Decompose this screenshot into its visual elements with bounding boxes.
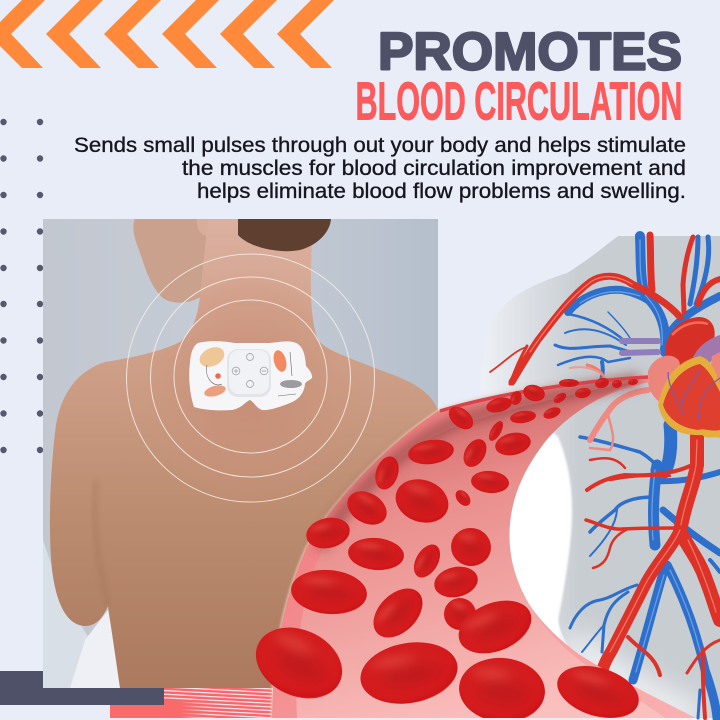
- control pad: [227, 349, 271, 397]
- arteries: [490, 235, 720, 718]
- artery highlights: [530, 277, 716, 652]
- massager patch: [189, 341, 312, 410]
- striped accent at bottom: [110, 688, 272, 718]
- photo backdrop: [43, 219, 438, 636]
- panel: blood vessel with red cells: [244, 376, 700, 720]
- description text: Sends small pulses through out your body and helps stimulate: [74, 134, 686, 157]
- right lobe: [710, 352, 720, 390]
- purple vein ends: [622, 341, 658, 353]
- fade near vessel: [570, 640, 700, 720]
- orange chevron band: [0, 0, 334, 68]
- yellow fat border: [658, 356, 720, 438]
- lumen top shadow: [320, 380, 640, 548]
- pale branch arteries: [590, 390, 648, 450]
- body silhouette: [480, 236, 720, 718]
- vein highlights: [580, 240, 704, 672]
- description text: [74, 134, 686, 203]
- head hair: [238, 219, 331, 251]
- aortic arch: [665, 317, 715, 372]
- panel: back photo with massager: [43, 219, 438, 688]
- coronary vessels: [668, 370, 720, 420]
- dot grid decoration: [0, 119, 43, 453]
- face and ear: [133, 219, 214, 303]
- back and shoulders: [50, 219, 438, 688]
- description text: the muscles for blood circulation improvement and: [182, 157, 686, 180]
- heart: [648, 317, 720, 438]
- description text: helps eliminate blood flow problems and swelling.: [197, 180, 686, 203]
- arm crease shadow: [95, 480, 108, 606]
- vessel red rim: [440, 377, 648, 411]
- red blood cells: [244, 376, 645, 720]
- vessel wall: [272, 376, 700, 720]
- pulse rings: [126, 254, 374, 502]
- pulmonary tube: [690, 335, 720, 378]
- white cloth: [43, 540, 125, 688]
- heart muscle: [663, 364, 720, 431]
- white arm gap: [490, 420, 572, 650]
- veins: [555, 236, 720, 718]
- skin glow around massager: [174, 296, 326, 418]
- vessel outer glow: [272, 376, 648, 720]
- title: PROMOTES: PROMOTES: [378, 22, 682, 82]
- dark accent bar: [0, 671, 164, 705]
- vessel lumen: [296, 381, 665, 718]
- panel: circulatory system illustration: [480, 235, 720, 720]
- pink lobes: [648, 356, 680, 405]
